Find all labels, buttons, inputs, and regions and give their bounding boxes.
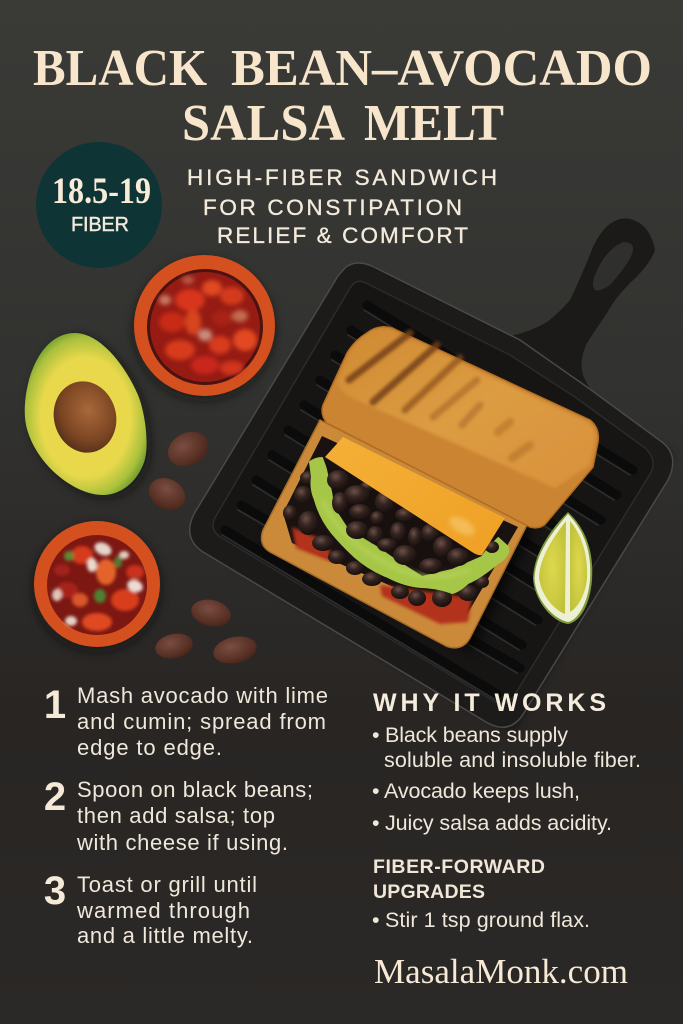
bullets: • [372,811,380,835]
lime wedge [533,512,592,624]
bullets: soluble and insoluble fiber. [384,748,641,772]
step 1: edge to edge. [77,735,222,760]
salsa bowl: top [133,255,275,401]
recipe steps [44,683,328,948]
salsa layer [292,527,472,624]
step 1 [44,683,328,760]
pan body [190,263,673,727]
black beans [326,465,505,574]
pan ridges [222,305,633,699]
pan well [213,281,653,703]
title: BEAN–AVOCADO [231,40,652,97]
step 2: Spoon on black beans; [77,777,313,802]
lower beans [283,471,489,607]
title: MELT [364,95,504,152]
step 1: 1 [44,683,66,727]
step 3: warmed through [76,898,250,923]
step 3: 3 [44,869,66,913]
salsa bowl: bottom [33,521,161,652]
avocado half [25,333,151,498]
title: BLACK [33,40,208,97]
grill marks [349,333,530,458]
pan handle [510,218,655,395]
cheese slice [325,437,505,555]
kidney beans [143,425,259,667]
step 3 [44,869,257,948]
subtitle: RELIEF & COMFORT [217,223,468,248]
step 3: and a little melty. [77,923,253,948]
step 1: and cumin; spread from [77,709,326,734]
sandwich [262,327,598,652]
bullets: • [372,723,380,747]
subtitle: FOR CONSTIPATION [203,195,462,220]
step 2: then add salsa; top [77,803,275,828]
subtitle: HIGH-FIBER SANDWICH [187,165,497,190]
bottom bread slice [262,420,527,648]
title [33,40,652,152]
avocado pit [46,374,124,460]
step 2 [44,775,313,855]
bullets: Juicy salsa adds acidity. [385,811,612,835]
website: MasalaMonk.com [374,952,628,991]
fiber-forward upgrades: Stir 1 tsp ground flax. [385,908,590,932]
fiber badge: 18.5-19 [52,171,151,212]
step 2: 2 [44,775,66,819]
bullets [372,723,641,835]
subtitle [187,165,497,248]
fiber-forward upgrades: UPGRADES [373,881,485,903]
bullets: • [372,779,380,803]
fiber badge [36,142,162,268]
fiber-forward upgrades: • [372,908,380,932]
step 1: Mash avocado with lime [77,683,328,708]
top bread slice [322,327,598,528]
fiber-forward upgrades: FIBER-FORWARD [373,856,545,878]
step 2: with cheese if using. [76,830,288,855]
step 3: Toast or grill until [77,872,257,897]
bread interior [283,436,518,618]
bullets: Avocado keeps lush, [384,779,580,803]
fiber badge: FIBER [71,214,129,236]
bullets: Black beans supply [385,723,568,747]
fiber-forward upgrades [372,856,590,932]
guacamole [310,458,508,593]
title: SALSA [182,95,345,152]
grill pan [190,218,673,730]
why it works [372,689,641,835]
heading: WHY IT WORKS [373,689,606,717]
